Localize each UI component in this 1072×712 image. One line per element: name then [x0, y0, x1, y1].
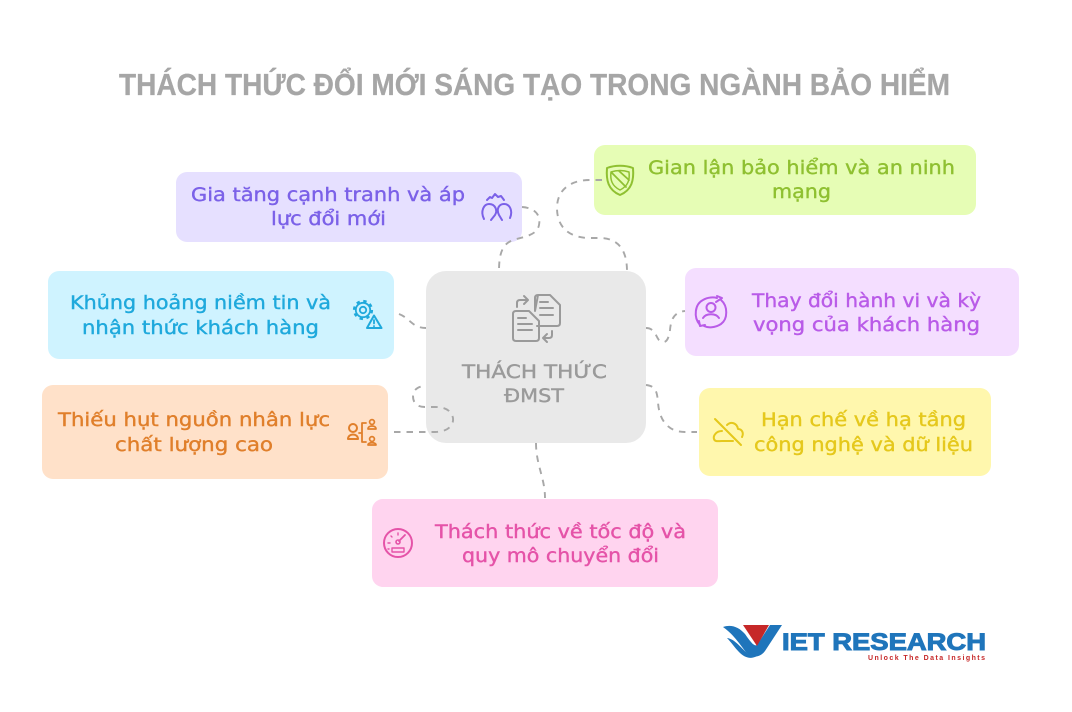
text: speed: quy mô chuyển đổi [462, 545, 659, 567]
connector: yellow to center [646, 385, 697, 432]
icon: people and gear [482, 194, 511, 220]
text: center node: THÁCH THỨC [461, 359, 607, 383]
text: speed [434, 521, 686, 567]
icon: shield [607, 166, 633, 195]
logo wordmark: IET RESEARCH [782, 629, 986, 656]
text: human resources: chất lượng cao [115, 434, 273, 456]
text: trust: nhận thức khách hàng [82, 317, 319, 339]
text: trust [70, 292, 331, 339]
text: infrastructure: Hạn chế về hạ tầng [761, 409, 966, 431]
panel: customer behaviour [685, 268, 1019, 356]
text: fraud: Gian lận bảo hiểm và an ninh [648, 157, 955, 179]
panel: customer trust [48, 271, 394, 359]
panel: human resources [42, 385, 388, 479]
text: center node: ĐMST [504, 385, 564, 407]
panel: center node [426, 271, 646, 443]
icon: people hierarchy [348, 420, 376, 445]
connector: purple to center [499, 207, 539, 271]
text: human resources: Thiếu hụt nguồn nhân lực [57, 409, 330, 431]
text: behaviour [751, 290, 981, 336]
text: behaviour: Thay đổi hành vi và kỳ [751, 290, 981, 312]
connector: orange to center [394, 386, 453, 432]
panel: competition [176, 172, 522, 242]
text: competition [191, 184, 465, 230]
text: center node [461, 359, 607, 407]
title: THÁCH THỨC ĐỔI MỚI SÁNG TẠO TRONG NGÀNH BẢO HIỂM [119, 66, 950, 102]
icon: user cycle [696, 296, 726, 327]
icon: gear and warning [354, 301, 383, 329]
icon: gauge [384, 529, 412, 557]
connector: lilac to center [646, 311, 685, 342]
panel: infrastructure [699, 388, 991, 476]
text: infrastructure: công nghệ và dữ liệu [754, 434, 973, 456]
text: fraud: mạng [772, 181, 831, 203]
text: infrastructure [754, 409, 973, 456]
panel: fraud and cyber security [594, 145, 976, 215]
icon: crossed cloud [714, 419, 743, 445]
logo tagline: Unlock The Data Insights [868, 655, 985, 662]
text: competition: lực đổi mới [271, 208, 386, 230]
text: human resources [57, 409, 330, 456]
connector: green to center [557, 180, 627, 271]
text: trust: Khủng hoảng niềm tin và [70, 292, 331, 314]
text: behaviour: vọng của khách hàng [753, 314, 980, 336]
logo mark [723, 625, 782, 658]
logo: Viet Research [723, 625, 986, 662]
panel: speed and scale [372, 499, 718, 587]
connector: cyan to center [399, 314, 426, 328]
connector: pink to center [536, 443, 545, 498]
text: speed: Thách thức về tốc độ và [434, 521, 686, 543]
icon: documents [513, 295, 560, 342]
text: competition: Gia tăng cạnh tranh và áp [191, 184, 465, 206]
text: fraud [648, 157, 955, 203]
